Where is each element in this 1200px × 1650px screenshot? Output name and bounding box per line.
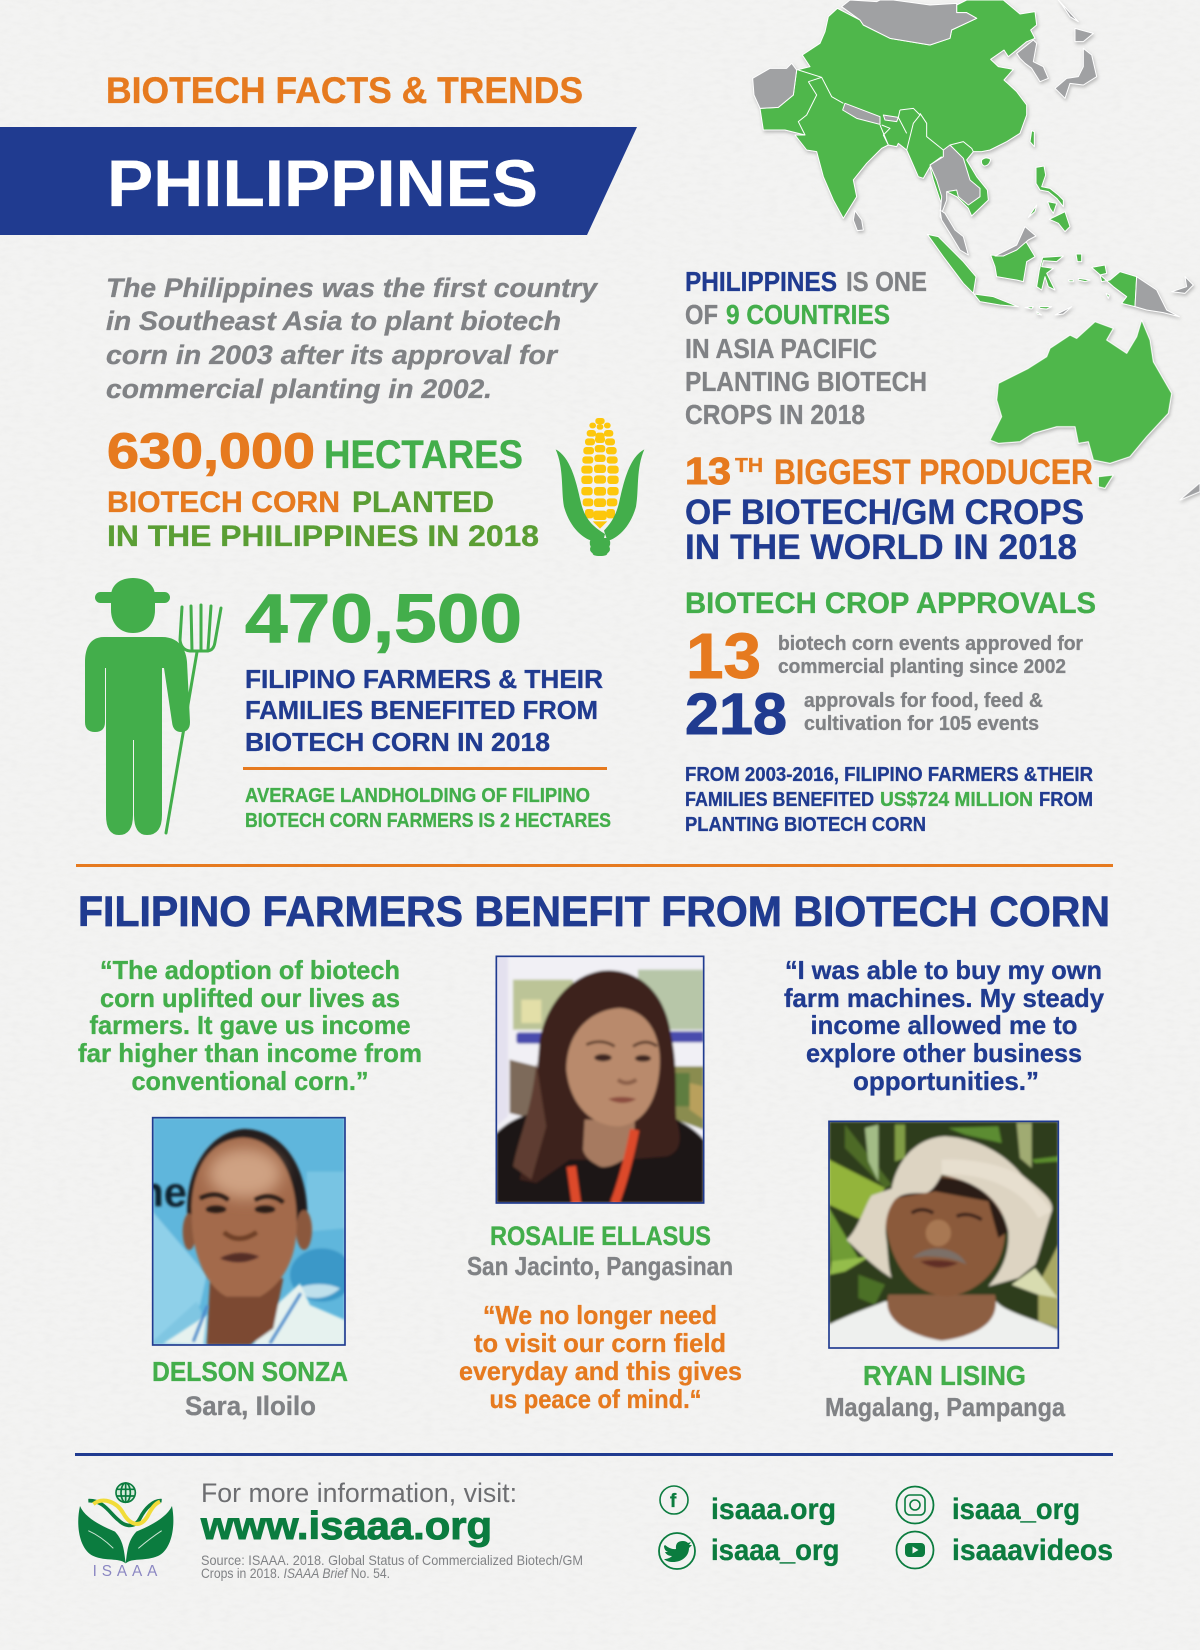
quote: Delson Sonza xyxy=(78,955,422,1096)
stat: 630,000 hectares: HECTARES xyxy=(324,433,523,477)
quote: Ryan Lising: farm machines. My steady xyxy=(784,983,1105,1013)
intro text block: in Southeast Asia to plant biotech xyxy=(106,306,561,336)
text block: nine countries: IS ONE xyxy=(846,266,927,297)
stat: 13th biggest producer: OF BIOTECH/GM CROPS xyxy=(685,493,1084,532)
quote: Ryan Lising: “I was able to buy my own xyxy=(785,955,1102,985)
stat: 630,000 hectares: IN THE PHILIPPINES IN 2018 xyxy=(107,520,539,553)
name: Ryan Lising: RYAN LISING xyxy=(863,1360,1026,1391)
name: Rosalie Ellasus: San Jacinto, Pangasinan xyxy=(467,1251,733,1281)
quote: Ryan Lising: explore other business xyxy=(806,1038,1082,1068)
map: mainland Asia xyxy=(753,0,1097,240)
logo helix xyxy=(88,1501,162,1525)
stat: 13th biggest producer: TH xyxy=(735,455,763,477)
footer: website and source: Source: ISAAA. 2018. Global Status of Commercialized Biotech/GM xyxy=(201,1552,583,1568)
name: Ryan Lising: Magalang, Pampanga xyxy=(825,1392,1065,1422)
quote: Rosalie Ellasus: “We no longer need xyxy=(483,1300,717,1330)
social: twitter: isaaa_org xyxy=(711,1534,840,1567)
section heading: FILIPINO FARMERS BENEFIT FROM BIOTECH CORN xyxy=(78,888,1110,936)
map: Australia and New Zealand xyxy=(990,320,1200,500)
name: Ryan Lising xyxy=(825,1360,1065,1422)
text block: nine countries: PLANTING BIOTECH xyxy=(685,366,927,397)
footer: website and source: www.isaaa.org xyxy=(200,1505,492,1548)
logo: ISAAA xyxy=(78,1483,173,1580)
stat: 470,500 farmers xyxy=(243,580,611,832)
panel: biotech crop approvals: FROM 2003-2016, FILIPINO FARMERS &THEIR xyxy=(685,763,1093,786)
icon: farmer with pitchfork xyxy=(85,578,221,835)
name: Rosalie Ellasus: ROSALIE ELLASUS xyxy=(490,1221,711,1251)
intro text block: corn in 2003 after its approval for xyxy=(106,340,559,370)
farmer hat and head xyxy=(95,578,170,633)
text block: nine countries: PHILIPPINES xyxy=(685,266,837,297)
name: Delson Sonza: DELSON SONZA xyxy=(152,1356,348,1387)
quote: Delson Sonza: “The adoption of biotech xyxy=(100,955,400,985)
name: Rosalie Ellasus xyxy=(467,1221,733,1281)
stat: 13th biggest producer: BIGGEST PRODUCER xyxy=(774,453,1093,492)
stat: 630,000 hectares: 630,000 xyxy=(107,423,315,479)
photo: Rosalie Ellasus xyxy=(496,956,704,1203)
intro text block: The Philippines was the first country xyxy=(106,273,599,303)
panel: biotech crop approvals: commercial planting since 2002 xyxy=(778,656,1066,678)
quote: Ryan Lising: income allowed me to xyxy=(810,1010,1078,1040)
stat: 470,500 farmers: FAMILIES BENEFITED FROM xyxy=(245,697,598,725)
logo: ISAAA: ISAAA xyxy=(93,1563,158,1580)
text block: nine countries: CROPS IN 2018 xyxy=(685,399,865,430)
panel: biotech crop approvals: approvals for food, feed & xyxy=(804,690,1043,712)
panel: biotech crop approvals xyxy=(685,587,1096,836)
stat: 13th biggest producer: 13 xyxy=(685,451,731,493)
photo: Ryan Lising xyxy=(829,1121,1058,1348)
farmer body xyxy=(85,637,190,835)
name: Delson Sonza xyxy=(152,1356,348,1421)
social: facebook xyxy=(660,1486,836,1526)
map: Asia Pacific biotech countries xyxy=(753,0,1200,500)
quote: Rosalie Ellasus: everyday and this gives xyxy=(459,1356,742,1386)
social: instagram: isaaa_org xyxy=(952,1493,1080,1526)
logo leaves xyxy=(78,1506,173,1563)
title: BIOTECH FACTS & TRENDS xyxy=(106,70,583,111)
map: Southeast Asia islands xyxy=(927,166,1193,317)
social: facebook: isaaa.org xyxy=(711,1493,836,1526)
quote: Ryan Lising xyxy=(784,955,1105,1096)
banner: Philippines: PHILIPPINES xyxy=(107,146,538,220)
panel: biotech crop approvals: PLANTING BIOTECH CORN xyxy=(685,813,926,836)
icon: corn xyxy=(556,418,644,556)
panel: biotech crop approvals: US$724 MILLION xyxy=(880,788,1033,811)
photo: Delson Sonza: he xyxy=(138,1169,187,1216)
logo globe xyxy=(116,1483,135,1502)
banner: Philippines xyxy=(0,127,637,235)
stat: 470,500 farmers: FILIPINO FARMERS & THEIR xyxy=(245,666,603,694)
quote: Delson Sonza: far higher than income from xyxy=(78,1038,422,1068)
social: twitter xyxy=(659,1533,840,1569)
footer: website and source: For more information, visit: xyxy=(201,1478,517,1508)
stat: 13th biggest producer: IN THE WORLD IN 2018 xyxy=(685,528,1077,567)
stat: 630,000 hectares: PLANTED xyxy=(352,486,494,519)
panel: biotech crop approvals: 218 xyxy=(685,682,787,747)
photo: Delson Sonza xyxy=(138,1118,353,1345)
pitchfork xyxy=(166,605,221,833)
panel: biotech crop approvals: 13 xyxy=(686,620,761,692)
social: youtube xyxy=(896,1532,1113,1568)
text block: nine countries: IN ASIA PACIFIC xyxy=(685,333,877,364)
name: Delson Sonza: Sara, Iloilo xyxy=(185,1391,316,1421)
social: facebook: f xyxy=(670,1491,677,1512)
panel: biotech crop approvals: FAMILIES BENEFITED xyxy=(685,788,874,811)
stat: 630,000 hectares: BIOTECH CORN xyxy=(107,486,340,519)
stat: 13th biggest producer xyxy=(685,451,1093,567)
stat: 630,000 hectares xyxy=(107,423,539,553)
panel: biotech crop approvals: biotech corn events approved for xyxy=(778,633,1083,655)
stat: 470,500 farmers: AVERAGE LANDHOLDING OF FILIPINO xyxy=(245,784,590,807)
panel: biotech crop approvals: BIOTECH CROP APPROVALS xyxy=(685,587,1096,620)
social: instagram xyxy=(896,1486,1080,1526)
social: youtube: isaaavideos xyxy=(952,1534,1113,1567)
quote: Rosalie Ellasus: to visit our corn field xyxy=(474,1328,726,1358)
quote: Delson Sonza: corn uplifted our lives as xyxy=(100,983,400,1013)
panel: biotech crop approvals: cultivation for 105 events xyxy=(804,713,1039,735)
quote: Delson Sonza: conventional corn.” xyxy=(132,1066,368,1096)
footer: website and source: Crops in 2018. ISAAA Brief No. 54. xyxy=(201,1565,390,1581)
intro text block: commercial planting in 2002. xyxy=(106,374,492,404)
intro text block xyxy=(106,273,599,404)
quote: Rosalie Ellasus: us peace of mind.“ xyxy=(490,1384,702,1414)
quote: Delson Sonza: farmers. It gave us income xyxy=(90,1010,410,1040)
text block: nine countries: OF xyxy=(685,299,718,330)
quote: Ryan Lising: opportunities.” xyxy=(853,1066,1039,1096)
quote: Rosalie Ellasus xyxy=(459,1300,742,1414)
stat: 470,500 farmers: BIOTECH CORN IN 2018 xyxy=(245,729,550,757)
panel: biotech crop approvals: FROM xyxy=(1039,788,1093,811)
stat: 470,500 farmers: 470,500 xyxy=(245,580,522,657)
text block: nine countries: 9 COUNTRIES xyxy=(726,299,890,330)
footer: website and source xyxy=(200,1478,583,1581)
stat: 470,500 farmers: BIOTECH CORN FARMERS IS 2 HECTARES xyxy=(245,809,611,832)
text block: nine countries xyxy=(685,266,927,430)
